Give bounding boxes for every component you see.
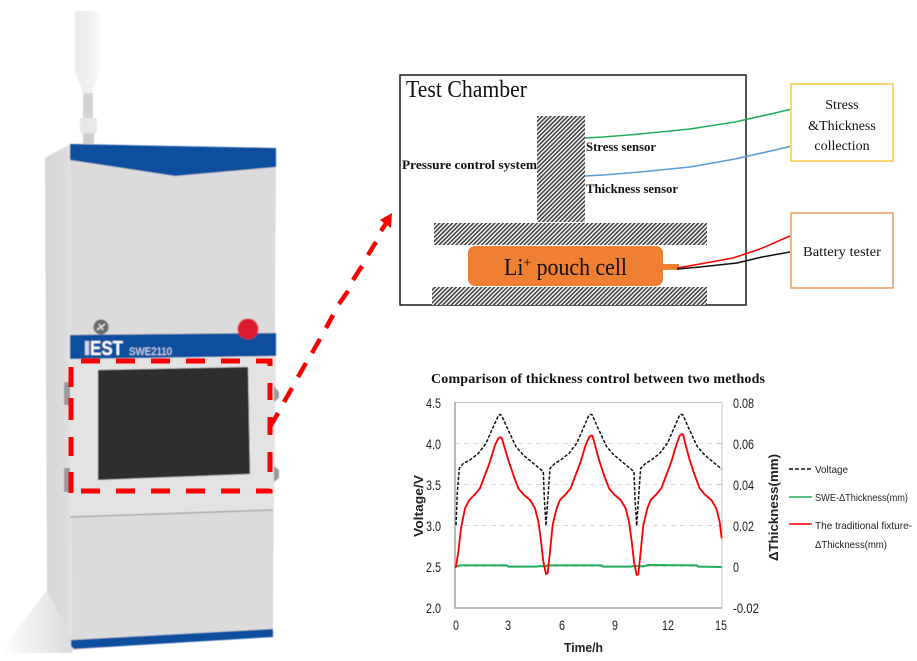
touch screen	[98, 367, 250, 480]
right axis labels: 0.04	[733, 477, 754, 493]
left axis labels: 3.5	[426, 477, 441, 493]
x axis labels: 3	[505, 617, 511, 633]
line chart: voltage and thickness	[412, 395, 781, 655]
left axis labels: 2.0	[426, 600, 441, 616]
series: SWE thickness	[455, 565, 722, 567]
floor shadow	[0, 590, 72, 653]
x axis labels: 12	[662, 617, 674, 633]
label: thickness sensor: Thickness sensor	[586, 181, 678, 196]
x axis labels: 0	[453, 617, 459, 633]
brand band: SWE2110	[129, 346, 172, 358]
right axis labels: 0.08	[733, 395, 754, 411]
pressure column	[537, 116, 585, 222]
label: stress sensor: Stress sensor	[586, 139, 656, 154]
x axis labels: 9	[612, 617, 618, 633]
red stop button	[238, 318, 258, 340]
box: stress and thickness collection: collection	[814, 139, 870, 154]
legend: voltage: Voltage	[815, 464, 848, 476]
red dashed arrow	[270, 213, 392, 427]
bottom blue band	[71, 629, 273, 649]
x axis labels: 6	[559, 617, 565, 633]
left axis labels: 2.5	[426, 559, 441, 575]
box: stress and thickness collection: &Thickness	[808, 119, 876, 134]
x axis labels: 15	[715, 617, 727, 633]
top blue band	[70, 144, 276, 176]
box: battery tester	[791, 213, 893, 288]
panel: test chamber	[400, 75, 746, 305]
brand band	[70, 333, 276, 360]
left axis title: Voltage/V	[412, 474, 426, 537]
right axis labels: 0.06	[733, 436, 754, 452]
box: battery tester: Battery tester	[803, 245, 881, 260]
screw	[94, 320, 108, 334]
pouch cell: Li	[504, 255, 525, 281]
x axis labels	[453, 617, 727, 633]
left axis labels	[426, 395, 441, 616]
upper platen	[434, 223, 707, 245]
box: stress and thickness collection	[791, 84, 893, 161]
left axis labels: 4.5	[426, 395, 441, 411]
right axis labels: -0.02	[733, 600, 759, 616]
chart title: Comparison of thickness control between two methods	[431, 372, 766, 387]
label: pressure control system: Pressure control system	[402, 157, 537, 172]
panel seam	[70, 510, 273, 517]
lower platen	[432, 287, 707, 305]
pouch cell: +	[523, 255, 531, 271]
series: voltage	[456, 414, 722, 526]
red dashed highlight box	[71, 361, 270, 493]
right axis labels: 0	[733, 559, 739, 575]
wire: cell to battery tester negative	[677, 252, 790, 269]
x axis title: Time/h	[564, 641, 603, 655]
legend: traditional fixture thickness: The traditional fixture-	[815, 520, 912, 532]
signal lamp	[75, 11, 100, 144]
box: stress and thickness collection: Stress	[825, 98, 859, 113]
right axis title: ΔThickness(mm)	[767, 454, 781, 561]
series: traditional fixture thickness	[455, 434, 722, 575]
heading: Test Chamber: Test Chamber	[406, 77, 527, 103]
left axis labels: 3.0	[426, 518, 441, 534]
left axis labels: 4.0	[426, 436, 441, 452]
legend	[789, 464, 912, 551]
pouch cell: pouch cell	[531, 255, 627, 281]
wire: stress sensor to collection	[585, 109, 792, 138]
brand band: EST	[90, 338, 123, 360]
right axis labels	[733, 395, 759, 616]
wire: thickness sensor to collection	[585, 146, 792, 176]
side hinges	[64, 382, 279, 492]
series curves	[455, 414, 722, 575]
legend: traditional fixture thickness	[789, 520, 912, 551]
plot frame and grid	[455, 402, 722, 608]
front door panel	[70, 355, 276, 517]
pouch cell	[468, 246, 679, 286]
right axis labels: 0.02	[733, 518, 754, 534]
wire: cell to battery tester positive	[677, 236, 790, 268]
device: IEST SWE2110 instrument	[0, 11, 279, 653]
cabinet front	[70, 144, 276, 650]
cabinet side	[45, 144, 72, 640]
legend: traditional fixture thickness: ΔThickness(mm)	[815, 539, 887, 551]
